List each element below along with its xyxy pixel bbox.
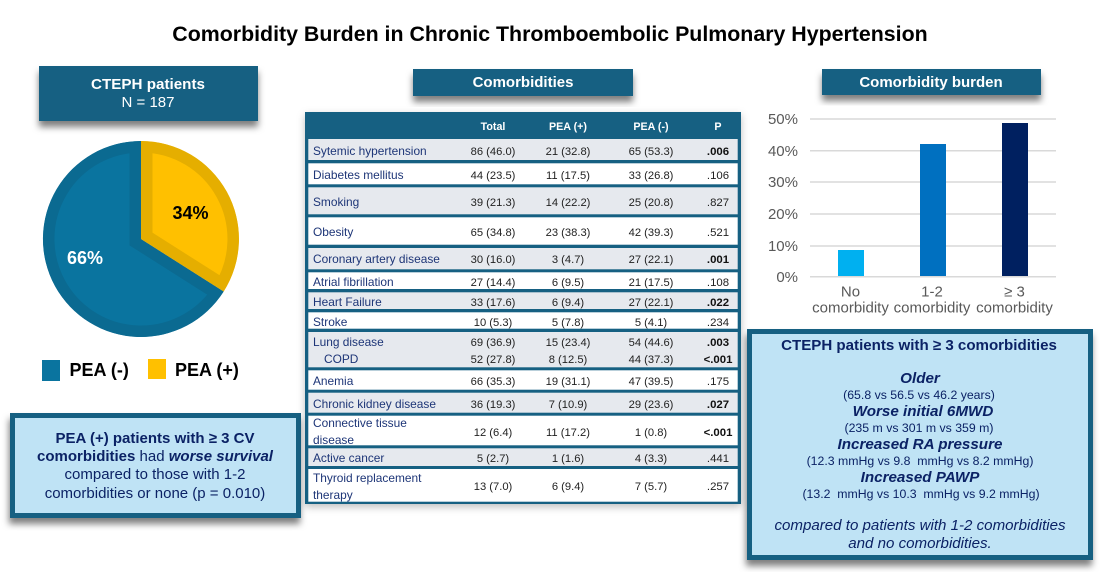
row: systemic hypertension: 65 (53.3) [629,146,674,158]
row: anemia: 19 (31.1) [546,376,591,388]
row: systemic hypertension: .006 [707,146,729,158]
row: anemia: Anemia [313,374,354,388]
row: thyroid replacement therapy: 7 (5.7) [635,481,667,493]
slice: PEA (+) 34% [141,141,239,292]
row: smoking: 14 (22.2) [546,197,591,209]
callout: patients with 3 or more comorbidities: Increased RA pressure [838,436,1003,453]
row: active cancer: 5 (2.7) [477,453,509,465]
row: coronary artery disease: .001 [707,254,730,266]
bar: 3 or more comorbidity [1002,123,1028,276]
callout: patients with 3 or more comorbidities [750,332,1090,558]
callout: patients with 3 or more comorbidities: (13.2 mmHg vs 10.3 mmHg vs 9.2 mmHg) [802,487,1040,501]
row: chronic kidney disease: 36 (19.3) [471,399,516,411]
row: lung disease and COPD: 52 (27.8) [471,354,516,366]
row: heart failure: 6 (9.4) [552,297,584,309]
pie chart [43,141,239,337]
callout: patients with 3 or more comorbidities: (12.3 mmHg vs 9.8 mmHg vs 8.2 mmHg) [807,454,1033,468]
row: atrial fibrillation: Atrial fibrillation [313,275,394,289]
label: 34%: 34% [172,203,209,223]
pie legend: PEA (-) [70,360,129,380]
row: atrial fibrillation: 6 (9.5) [552,277,584,289]
row: diabetes mellitus [308,163,738,184]
comorbidities table [305,112,741,504]
title: Comorbidity Burden in Chronic Thromboembolic Pulmonary Hypertension [172,22,928,46]
row: lung disease and COPD: <.001 [704,354,733,366]
row: stroke: 5 (7.8) [552,317,584,329]
row: obesity: Obesity [313,225,353,239]
row: heart failure: 33 (17.6) [471,297,516,309]
label: 66%: 66% [67,248,103,268]
row: connective tissue disease [308,416,738,447]
row: diabetes mellitus: 33 (26.8) [629,170,674,182]
callout: patients with 3 or more comorbidities: Worse initial 6MWD [853,403,993,420]
row: smoking: 39 (21.3) [471,197,516,209]
row: active cancer [308,448,738,466]
x axis labels: ≥ 3 [1004,284,1025,300]
callout: worse survival: comorbidities or none (p = 0.010) [45,485,265,502]
table header: P [714,121,722,133]
callout: worse survival [12,416,298,516]
row: coronary artery disease: Coronary artery disease [313,252,440,266]
row: chronic kidney disease: Chronic kidney disease [313,397,436,411]
row: heart failure [308,292,738,309]
row: coronary artery disease: 27 (22.1) [629,254,674,266]
row: diabetes mellitus: 11 (17.5) [546,170,590,182]
x axis labels: No [841,284,860,300]
slice: PEA (-) 66% [43,141,224,337]
row: connective tissue disease: <.001 [704,427,733,439]
row: anemia: 47 (39.5) [629,376,674,388]
row: chronic kidney disease: .027 [707,399,729,411]
row: connective tissue disease: Connective tissue [313,416,407,430]
table header: PEA (+) [549,121,587,133]
row: heart failure: Heart Failure [313,295,382,309]
row: stroke [308,312,738,329]
row: coronary artery disease: 3 (4.7) [552,254,584,266]
y axis labels: 20% [768,206,798,223]
row: anemia: .175 [707,376,729,388]
row: lung disease and COPD: 69 (36.9) [471,337,516,349]
table header: Total [481,121,505,133]
row: stroke: Stroke [313,315,348,329]
row: active cancer: Active cancer [313,451,384,465]
row: atrial fibrillation [308,272,738,289]
row: thyroid replacement therapy: 6 (9.4) [552,481,584,493]
row: thyroid replacement therapy: .257 [707,481,729,493]
row: anemia [308,370,738,390]
callout: patients with 3 or more comorbidities: (235 m vs 301 m vs 359 m) [845,421,993,435]
row: chronic kidney disease: 7 (10.9) [549,399,588,411]
row: lung disease and COPD: Lung disease [313,335,384,349]
callout: worse survival: comorbidities had worse survival [37,448,274,465]
heading: CTEPH patients [39,66,258,121]
row: lung disease and COPD: COPD [324,352,359,366]
row: thyroid replacement therapy: 13 (7.0) [474,481,513,493]
row: chronic kidney disease: 29 (23.6) [629,399,674,411]
bar: no comorbidity [838,250,864,276]
y axis labels [768,111,798,286]
row: coronary artery disease [308,248,738,269]
heading: Comorbidities [413,69,633,96]
callout: worse survival: PEA (+) patients with ≥ 3 CV [56,430,254,447]
row: smoking: 25 (20.8) [629,197,674,209]
callout: patients with 3 or more comorbidities: Older [900,370,941,387]
row: diabetes mellitus: 44 (23.5) [471,170,516,182]
y axis labels: 10% [768,238,798,255]
y axis labels: 30% [768,174,798,191]
bar: 1-2 comorbidity [920,144,946,276]
row: lung disease and COPD: 8 (12.5) [549,354,588,366]
row: connective tissue disease: disease [313,433,354,447]
row: lung disease and COPD: .003 [707,337,729,349]
row: stroke: 10 (5.3) [474,317,513,329]
row: active cancer: .441 [707,453,729,465]
row: systemic hypertension: 21 (32.8) [546,146,591,158]
row: diabetes mellitus: .106 [707,170,729,182]
row: atrial fibrillation: .108 [707,277,729,289]
pie legend [42,359,239,381]
table header: PEA (-) [633,121,669,133]
row: atrial fibrillation: 27 (14.4) [471,277,516,289]
row: smoking [308,187,738,214]
row: chronic kidney disease [308,393,738,413]
heading: Comorbidities: Comorbidities [473,74,573,91]
row: anemia: 66 (35.3) [471,376,516,388]
row: active cancer: 1 (1.6) [552,453,584,465]
row: lung disease and COPD: 54 (44.6) [629,337,674,349]
row: thyroid replacement therapy: Thyroid replacement [313,471,422,485]
row: stroke: .234 [707,317,729,329]
row: connective tissue disease: 12 (6.4) [474,427,513,439]
y axis labels: 50% [768,111,798,128]
bar chart: comorbidity burden [768,111,1056,316]
callout: worse survival: compared to those with 1-2 [65,466,245,483]
row: lung disease and COPD: 44 (37.3) [629,354,674,366]
x axis labels: 1-2 [921,284,943,300]
row: smoking: .827 [707,197,729,209]
row: active cancer: 4 (3.3) [635,453,667,465]
row: obesity: 23 (38.3) [546,227,591,239]
x axis labels: comorbidity [976,300,1053,316]
heading: CTEPH patients: N = 187 [122,94,174,111]
row: coronary artery disease: 30 (16.0) [471,254,516,266]
row: atrial fibrillation: 21 (17.5) [629,277,674,289]
row: thyroid replacement therapy [308,469,738,502]
heading: CTEPH patients: CTEPH patients [91,76,205,93]
row: systemic hypertension [308,139,738,160]
heading: Comorbidity burden [822,69,1041,95]
row: heart failure: 27 (22.1) [629,297,674,309]
row: obesity: 42 (39.3) [629,227,674,239]
row: diabetes mellitus: Diabetes mellitus [313,168,404,182]
y axis labels: 40% [768,143,798,160]
heading: Comorbidity burden: Comorbidity burden [859,74,1003,91]
callout: patients with 3 or more comorbidities: and no comorbidities. [848,535,992,552]
row: stroke: 5 (4.1) [635,317,667,329]
row: obesity: 65 (34.8) [471,227,516,239]
x axis labels: comorbidity [812,300,889,316]
callout: patients with 3 or more comorbidities: (65.8 vs 56.5 vs 46.2 years) [843,388,995,402]
row: obesity [308,217,738,245]
table header [481,121,722,133]
y axis labels: 0% [776,269,798,286]
x axis labels [812,284,1053,316]
row: systemic hypertension: Sytemic hypertension [313,144,427,158]
row: smoking: Smoking [313,195,359,209]
row: systemic hypertension: 86 (46.0) [471,146,516,158]
row: obesity: .521 [707,227,729,239]
row: thyroid replacement therapy: therapy [313,488,353,502]
row: connective tissue disease: 1 (0.8) [635,427,667,439]
x axis labels: comorbidity [894,300,971,316]
row: lung disease and COPD: 15 (23.4) [546,337,591,349]
callout: patients with 3 or more comorbidities: CTEPH patients with ≥ 3 comorbidities [781,337,1057,354]
callout: patients with 3 or more comorbidities: compared to patients with 1-2 comorbidities [774,517,1066,534]
row: connective tissue disease: 11 (17.2) [546,427,590,439]
row: lung disease and COPD [308,332,738,367]
row: heart failure: .022 [707,297,729,309]
pie legend: PEA (+) [175,360,239,380]
callout: patients with 3 or more comorbidities: Increased PAWP [861,469,980,486]
